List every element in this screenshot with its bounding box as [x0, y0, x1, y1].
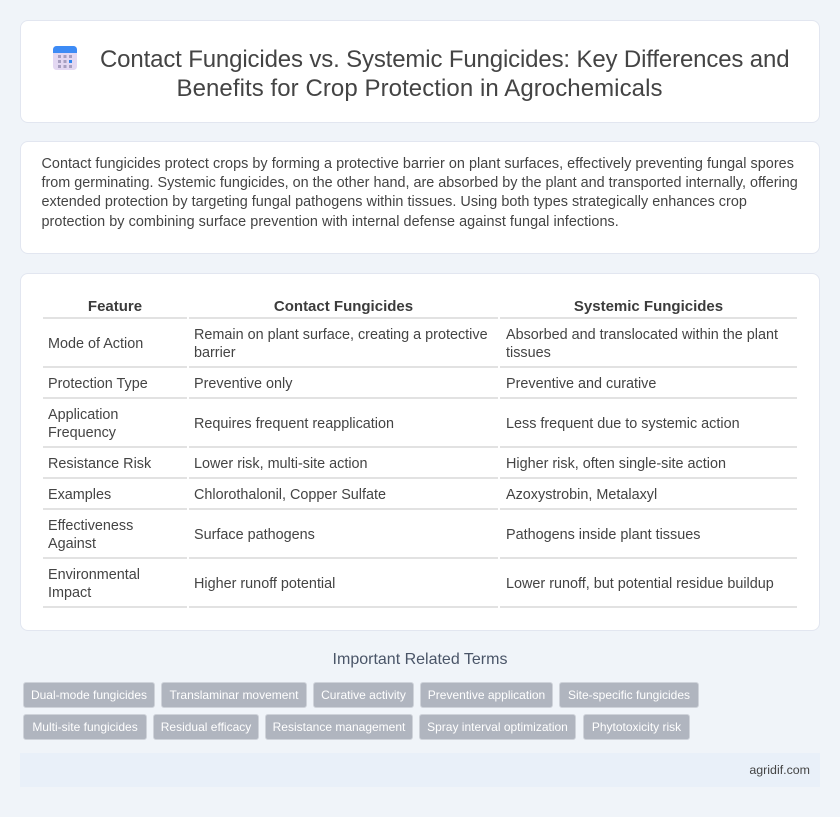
tags: related terms — [23, 682, 699, 740]
title: Contact Fungicides vs. Systemic Fungicides: Key Differences and — [100, 46, 789, 73]
title: Benefits for Crop Protection in Agrochemicals — [176, 75, 663, 102]
row: Examples: Azoxystrobin, Metalaxyl — [506, 487, 657, 503]
row: Examples: Examples — [48, 487, 111, 503]
icon: calendar — [53, 46, 77, 70]
title — [100, 46, 789, 102]
row: Environmental Impact: Environmental — [48, 567, 140, 583]
row: Protection Type: Preventive only — [194, 376, 292, 392]
row: Effectiveness Against: Pathogens inside plant tissues — [506, 527, 700, 543]
tags: related terms: Site-specific fungicides — [568, 688, 690, 702]
tags: related terms: Translaminar movement — [170, 688, 298, 702]
tags: related terms: Multi-site fungicides — [32, 720, 138, 734]
row: Effectiveness Against — [48, 518, 700, 552]
row: Effectiveness Against: Against — [48, 536, 96, 552]
intro paragraph — [42, 156, 798, 230]
intro paragraph: protection by combining surface prevention with internal defense against fungal infections. — [42, 214, 619, 230]
footer bar — [20, 753, 820, 787]
row: Resistance Risk: Resistance Risk — [48, 456, 151, 472]
row: Mode of Action: tissues — [506, 345, 551, 361]
row: Environmental Impact — [48, 567, 774, 601]
row: Protection Type — [48, 376, 656, 392]
intro paragraph: from germinating. Systemic fungicides, on the other hand, are absorbed by the plant and transported internally, offering — [42, 175, 798, 191]
tags: related terms: Spray interval optimization — [427, 720, 568, 734]
row: Protection Type: Preventive and curative — [506, 376, 656, 392]
row: Resistance Risk: Lower risk, multi-site action — [194, 456, 368, 472]
tags: related terms: Curative activity — [321, 688, 406, 702]
footer source: agridif.com — [749, 763, 810, 777]
row: Application Frequency: Requires frequent reapplication — [194, 416, 394, 432]
table header: Contact Fungicides — [274, 298, 413, 315]
tags: related terms: Phytotoxicity risk — [592, 720, 681, 734]
row: Effectiveness Against: Effectiveness — [48, 518, 133, 534]
panel: introduction text — [20, 141, 820, 254]
intro paragraph: Contact fungicides protect crops by forming a protective barrier on plant surfaces, effectively preventing fungal spores — [42, 156, 794, 172]
row: Mode of Action — [48, 327, 778, 361]
row: Application Frequency: Less frequent due to systemic action — [506, 416, 740, 432]
heading: important related terms: Important Related Terms — [333, 651, 507, 668]
row: Protection Type: Protection Type — [48, 376, 148, 392]
row: Environmental Impact: Higher runoff potential — [194, 576, 335, 592]
tags: related terms: Resistance management — [273, 720, 405, 734]
row: Mode of Action: Absorbed and translocated within the plant — [506, 327, 778, 343]
panel: title card — [20, 20, 820, 123]
row: Resistance Risk — [48, 456, 726, 472]
table header — [88, 298, 723, 315]
row: Resistance Risk: Higher risk, often single-site action — [506, 456, 726, 472]
row: Mode of Action: Remain on plant surface, creating a protective — [194, 327, 488, 343]
row: Examples — [48, 487, 657, 503]
row: Examples: Chlorothalonil, Copper Sulfate — [194, 487, 386, 503]
tags: related terms: Preventive application — [428, 688, 545, 702]
table header: Feature — [88, 298, 142, 315]
intro paragraph: extended protection by targeting fungal pathogens within tissues. Using both types strategically enhances crop — [42, 194, 747, 210]
row: Environmental Impact: Impact — [48, 585, 91, 601]
panel: comparison table — [20, 273, 820, 631]
table header: Systemic Fungicides — [574, 298, 723, 315]
tags: related terms: Dual-mode fungicides — [31, 688, 147, 702]
row: Application Frequency: Application — [48, 407, 118, 423]
row: Mode of Action: Mode of Action — [48, 336, 143, 352]
row: Environmental Impact: Lower runoff, but potential residue buildup — [506, 576, 774, 592]
row: Application Frequency — [48, 407, 740, 441]
row: Application Frequency: Frequency — [48, 425, 116, 441]
row: Effectiveness Against: Surface pathogens — [194, 527, 315, 543]
row: Mode of Action: barrier — [194, 345, 236, 361]
tags: related terms: Residual efficacy — [161, 720, 251, 734]
